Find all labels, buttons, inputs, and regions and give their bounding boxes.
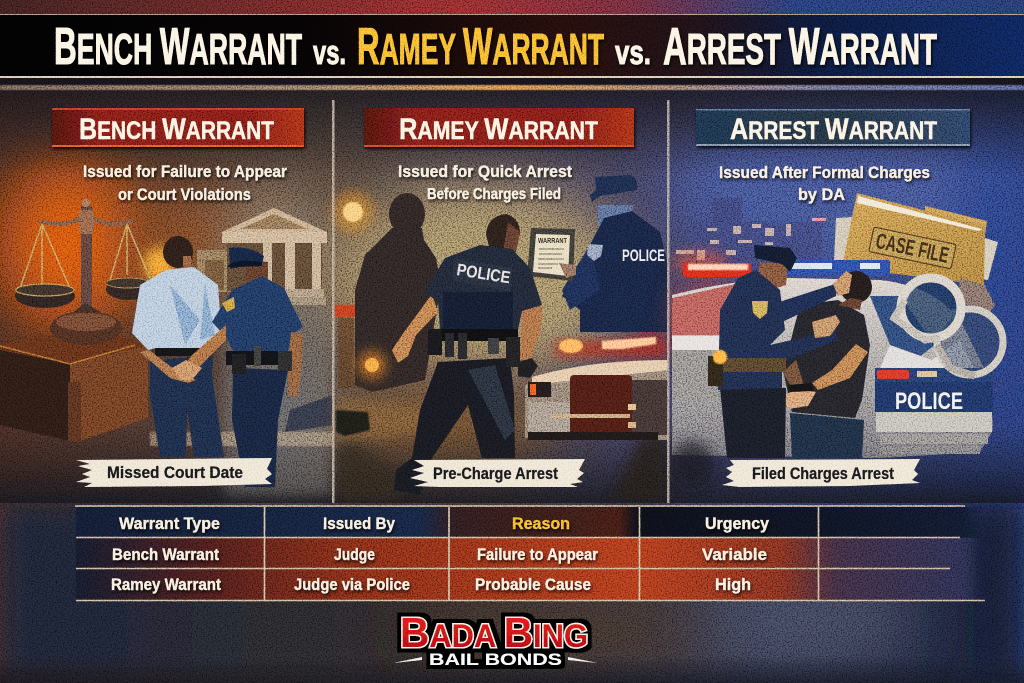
panel dividers	[332, 100, 670, 503]
heading: bench warrant: BENCH WARRANT	[79, 113, 274, 146]
title text	[54, 18, 937, 76]
title text: ARREST WARRANT	[663, 18, 937, 76]
title text: RAMEY WARRANT	[357, 18, 604, 76]
heading: ramey warrant: RAMEY WARRANT	[399, 113, 598, 146]
pedestal	[0, 335, 148, 442]
title text: vs.	[313, 34, 346, 72]
street lamps	[333, 192, 373, 388]
shadow figure	[355, 193, 441, 392]
description: ramey warrant: Issued for Quick Arrest	[398, 162, 572, 181]
label: filed charges arrest	[722, 459, 920, 487]
panel: bench warrant	[0, 108, 333, 495]
police officer	[172, 247, 303, 487]
police car: side: POLICE	[895, 388, 963, 415]
case file folder: CASE FILE	[874, 228, 951, 268]
description: bench warrant: or Court Violations	[118, 185, 251, 204]
description: arrest warrant: by DA	[798, 185, 845, 204]
title text: vs.	[615, 34, 651, 72]
top band	[0, 0, 1024, 90]
police car: rear	[525, 295, 668, 440]
title text: BENCH WARRANT	[54, 18, 302, 76]
table row: ramey warrant: Ramey Warrant	[111, 576, 221, 594]
table row: ramey warrant: Judge via Police	[294, 576, 410, 594]
heading: arrest warrant: ARREST WARRANT	[730, 113, 937, 146]
description: bench warrant: Issued for Failure to Appear	[83, 162, 287, 181]
table row: bench warrant	[112, 546, 767, 564]
panel: arrest warrant	[670, 109, 1003, 489]
table row: bench warrant: Variable	[702, 546, 767, 564]
scales of justice	[15, 199, 150, 345]
comparison table	[75, 506, 985, 600]
table header row: Issued By	[323, 515, 396, 533]
label: missed court date	[76, 458, 272, 487]
label: pre-charge arrest	[410, 459, 585, 487]
courthouse illustration	[197, 208, 327, 305]
table header row: Urgency	[705, 515, 770, 533]
police officer holding warrant	[562, 175, 668, 332]
table header row: Warrant Type	[119, 515, 220, 533]
description: arrest warrant	[719, 163, 930, 204]
city skyline	[672, 198, 826, 274]
table row: ramey warrant: High	[715, 576, 751, 594]
road	[150, 305, 333, 495]
label: pre-charge arrest: Pre-Charge Arrest	[433, 464, 558, 483]
police car: side	[670, 260, 993, 489]
table row: bench warrant: Judge	[334, 546, 375, 564]
case file folder	[834, 193, 998, 285]
heading: ramey warrant	[364, 108, 634, 147]
police officer holding warrant: POLICE	[622, 246, 665, 265]
description: bench warrant	[83, 162, 287, 204]
warrant document: WARRANT	[538, 238, 568, 245]
description: ramey warrant	[398, 162, 572, 203]
description: arrest warrant: Issued After Formal Charges	[719, 163, 930, 182]
logo: bada bing bail bonds: BAIL BONDS	[429, 650, 562, 669]
street ground	[336, 395, 668, 500]
label: filed charges arrest: Filed Charges Arrest	[752, 464, 894, 483]
police officer walking: POLICE	[455, 260, 512, 287]
table header row: Reason	[512, 515, 570, 533]
handcuffs	[894, 278, 1003, 376]
table row: ramey warrant	[111, 576, 751, 594]
description: ramey warrant: Before Charges Filed	[427, 186, 561, 203]
suspect being arrested	[782, 271, 872, 458]
warrant document	[527, 228, 576, 281]
panel: ramey warrant	[333, 108, 668, 500]
police officer walking	[392, 214, 543, 495]
table row: ramey warrant: Probable Cause	[475, 576, 591, 594]
table row: bench warrant: Failure to Appear	[477, 546, 599, 564]
police officer arresting	[708, 245, 852, 458]
title banner	[0, 15, 1024, 78]
man in white shirt	[132, 236, 224, 457]
table header row	[119, 515, 770, 533]
logo: bada bing bail bonds: BADA BING	[400, 609, 588, 656]
label: missed court date: Missed Court Date	[107, 463, 243, 482]
table row: bench warrant: Bench Warrant	[112, 546, 219, 564]
